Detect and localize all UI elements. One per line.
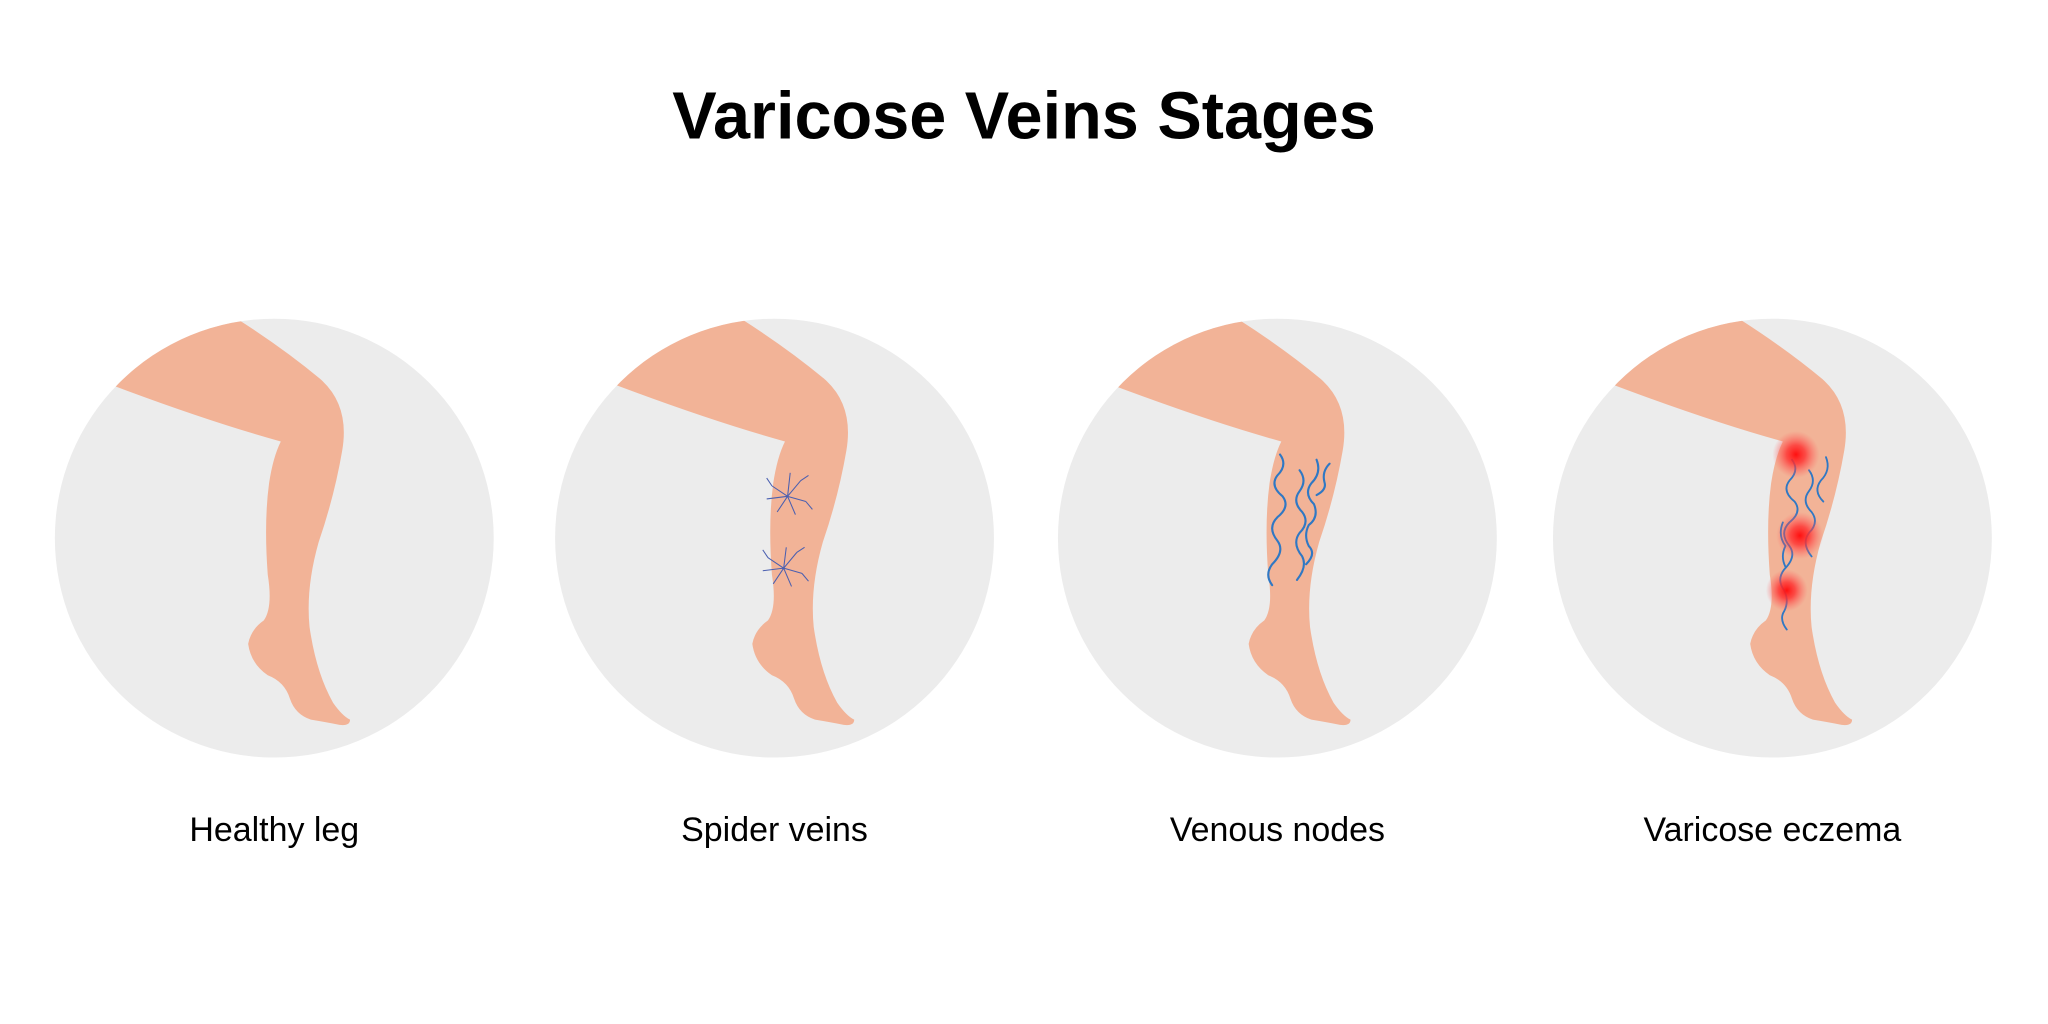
panel: venous nodes <box>1058 313 1497 849</box>
label: Varicose eczema <box>1644 811 1901 849</box>
leg illustration <box>617 320 854 726</box>
inflammation spots <box>1766 431 1823 611</box>
leg illustration <box>1118 322 1350 726</box>
leg illustration <box>1615 320 1852 726</box>
title: Varicose Veins Stages <box>672 79 1376 153</box>
label: Venous nodes <box>1170 811 1385 849</box>
leg illustration <box>116 321 350 726</box>
label: Healthy leg <box>189 811 359 849</box>
panel: varicose eczema <box>1553 313 1992 849</box>
panel: healthy leg <box>55 313 494 849</box>
label: Spider veins <box>681 811 868 849</box>
veins <box>1780 457 1828 630</box>
panel: spider veins <box>555 313 994 849</box>
varicose veins <box>1268 455 1330 585</box>
spider vein clusters <box>763 473 812 586</box>
